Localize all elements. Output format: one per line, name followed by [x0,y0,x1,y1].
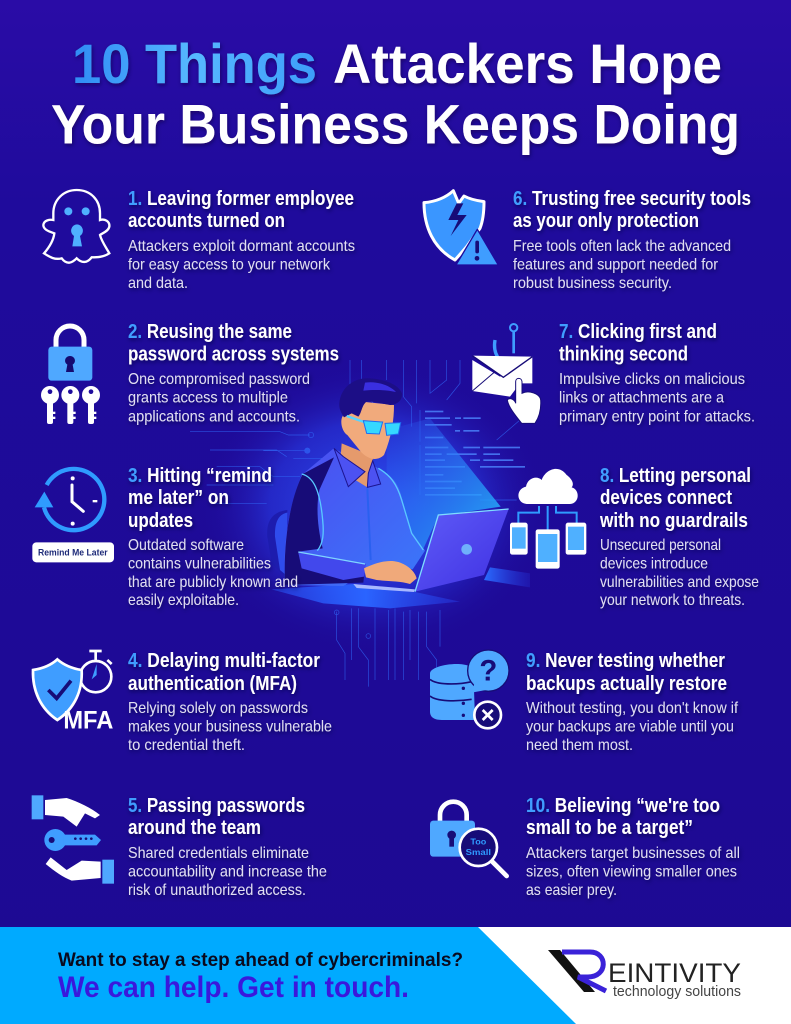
text block 3: contains vulnerabilities [128,556,271,572]
text block 8: devices introduce [600,556,708,572]
panel: item 9 [430,650,738,754]
text block 4: 4. Delaying multi-factor [128,650,320,672]
title: Attackers Hope [333,32,722,95]
text block 10: sizes, often viewing smaller ones [526,864,737,880]
text block 9: need them most. [526,737,633,754]
text block 2: applications and accounts. [128,408,300,426]
text block 9 [526,650,738,754]
neck [341,443,373,487]
text block 9: backups actually restore [526,673,727,695]
call to action [58,950,463,1004]
icon: hands passing a key [32,795,114,884]
text block 6 [513,188,751,292]
call to action: Want to stay a step ahead of cybercriminals? [58,950,463,971]
text block 4 [128,650,332,754]
icon: cloud with connected devices [510,469,586,569]
text block 5: around the team [128,817,261,839]
text block 3: 3. Hitting “remind [128,465,272,487]
torso [285,449,425,586]
text block 10: 10. Believing “we're too [526,795,720,817]
icon: padlock under magnifier: Too [470,837,486,847]
panel: item 10 [430,795,740,899]
text block 7: thinking second [559,344,688,366]
panel: item 7 [472,321,755,426]
icon: MFA shield and stopwatch: MFA [63,707,114,734]
panel: item 1 [43,188,355,292]
icon: ghost with keyhole [43,190,109,263]
panel: item 2 [41,321,339,426]
text block 7: Impulsive clicks on malicious [559,371,745,388]
icon: phishing hook, envelope and pointer [472,324,541,423]
text block 10: small to be a target” [526,817,693,839]
text block 3: updates [128,510,193,532]
text block 7: 7. Clicking first and [559,321,717,343]
text block 2: 2. Reusing the same [128,321,292,343]
laptop [353,509,509,592]
logo: Reintivity [548,950,741,1000]
text block 10 [526,795,740,899]
text block 3: me later” on [128,487,229,509]
text block 9: Without testing, you don't know if [526,700,738,717]
text block 8 [599,465,759,609]
panel: item 8 [510,465,759,609]
text block 5 [128,795,327,899]
text block 2: One compromised password [128,371,310,388]
text block 6: robust business security. [513,275,672,292]
panel: item 3 [32,465,298,609]
text block 8: your network to threats. [600,592,745,609]
text block 5: risk of unauthorized access. [128,882,306,899]
text block 4: to credential theft. [128,737,245,754]
forearm [298,553,366,580]
text block 1: accounts turned on [128,210,285,232]
text block 1: 1. Leaving former employee [128,188,354,210]
light beam [387,418,501,563]
title: Your Business Keeps Doing [51,92,740,156]
text block 2: grants access to multiple [128,390,288,406]
text block 7 [559,321,755,426]
logo: Reintivity: EINTIVITY [608,958,741,988]
icon: MFA shield and stopwatch [33,651,114,734]
text block 7: links or attachments are a [559,390,724,406]
text block 5: accountability and increase the [128,864,327,880]
text block 4: authentication (MFA) [128,673,297,695]
text block 6: 6. Trusting free security tools [513,188,751,210]
icon: padlock under magnifier: Small [466,847,491,857]
text block 1: Attackers exploit dormant accounts [128,238,355,255]
text block 1: and data. [128,275,188,292]
text block 1 [128,188,355,292]
text block 4: Relying solely on passwords [128,700,308,717]
icon: database, question bubble and x: ? [479,655,497,688]
footer banner [0,927,791,1024]
central illustration: person at laptop [190,360,547,687]
text block 8: Unsecured personal [600,537,721,554]
title: 10 Things [72,32,317,95]
text block 6: Free tools often lack the advanced [513,238,731,255]
text block 8: with no guardrails [599,510,748,532]
icon: padlock and keys [41,326,100,424]
text block 6: features and support needed for [513,256,719,274]
icon: database, question bubble and x [430,650,509,728]
chair [267,510,287,578]
text block 3: easily exploitable. [128,592,239,609]
text block 5: Shared credentials eliminate [128,845,309,862]
hand [364,561,417,584]
text block 4: makes your business vulnerable [128,718,332,736]
text block 2: password across systems [128,344,339,366]
text block 1: for easy access to your network [128,256,331,274]
logo: Reintivity: technology solutions [613,983,741,1000]
hair [339,378,402,417]
title [51,32,740,156]
call to action: We can help. Get in touch. [58,971,409,1004]
text block 9: your backups are viable until you [526,718,734,736]
text block 8: devices connect [600,487,732,509]
icon: clock with reminder button [32,469,114,562]
text block 8: vulnerabilities and expose [600,574,759,591]
text block 10: as easier prey. [526,882,617,899]
text block 3: that are publicly known and [128,574,298,591]
text block 3 [128,465,298,609]
text block 8: 8. Letting personal [600,465,751,487]
panel: item 6 [424,188,751,292]
head [341,402,394,459]
text block 10: Attackers target businesses of all [526,845,740,862]
panel: item 4 [33,650,332,754]
glasses [347,416,401,435]
text block 6: as your only protection [513,210,699,232]
text block 3: Outdated software [128,537,244,554]
text block 5: 5. Passing passwords [128,795,305,817]
icon: clock with reminder button: Remind Me Later [38,547,108,557]
text block 2 [128,321,339,426]
collar [334,448,365,487]
text block 9: 9. Never testing whether [526,650,725,672]
panel: item 5 [32,795,327,899]
icon: broken shield with warning [424,191,498,265]
dark shoulder and side [285,457,364,585]
text block 7: primary entry point for attacks. [559,408,755,426]
icon: padlock under magnifier [430,802,507,876]
desk [272,584,460,608]
